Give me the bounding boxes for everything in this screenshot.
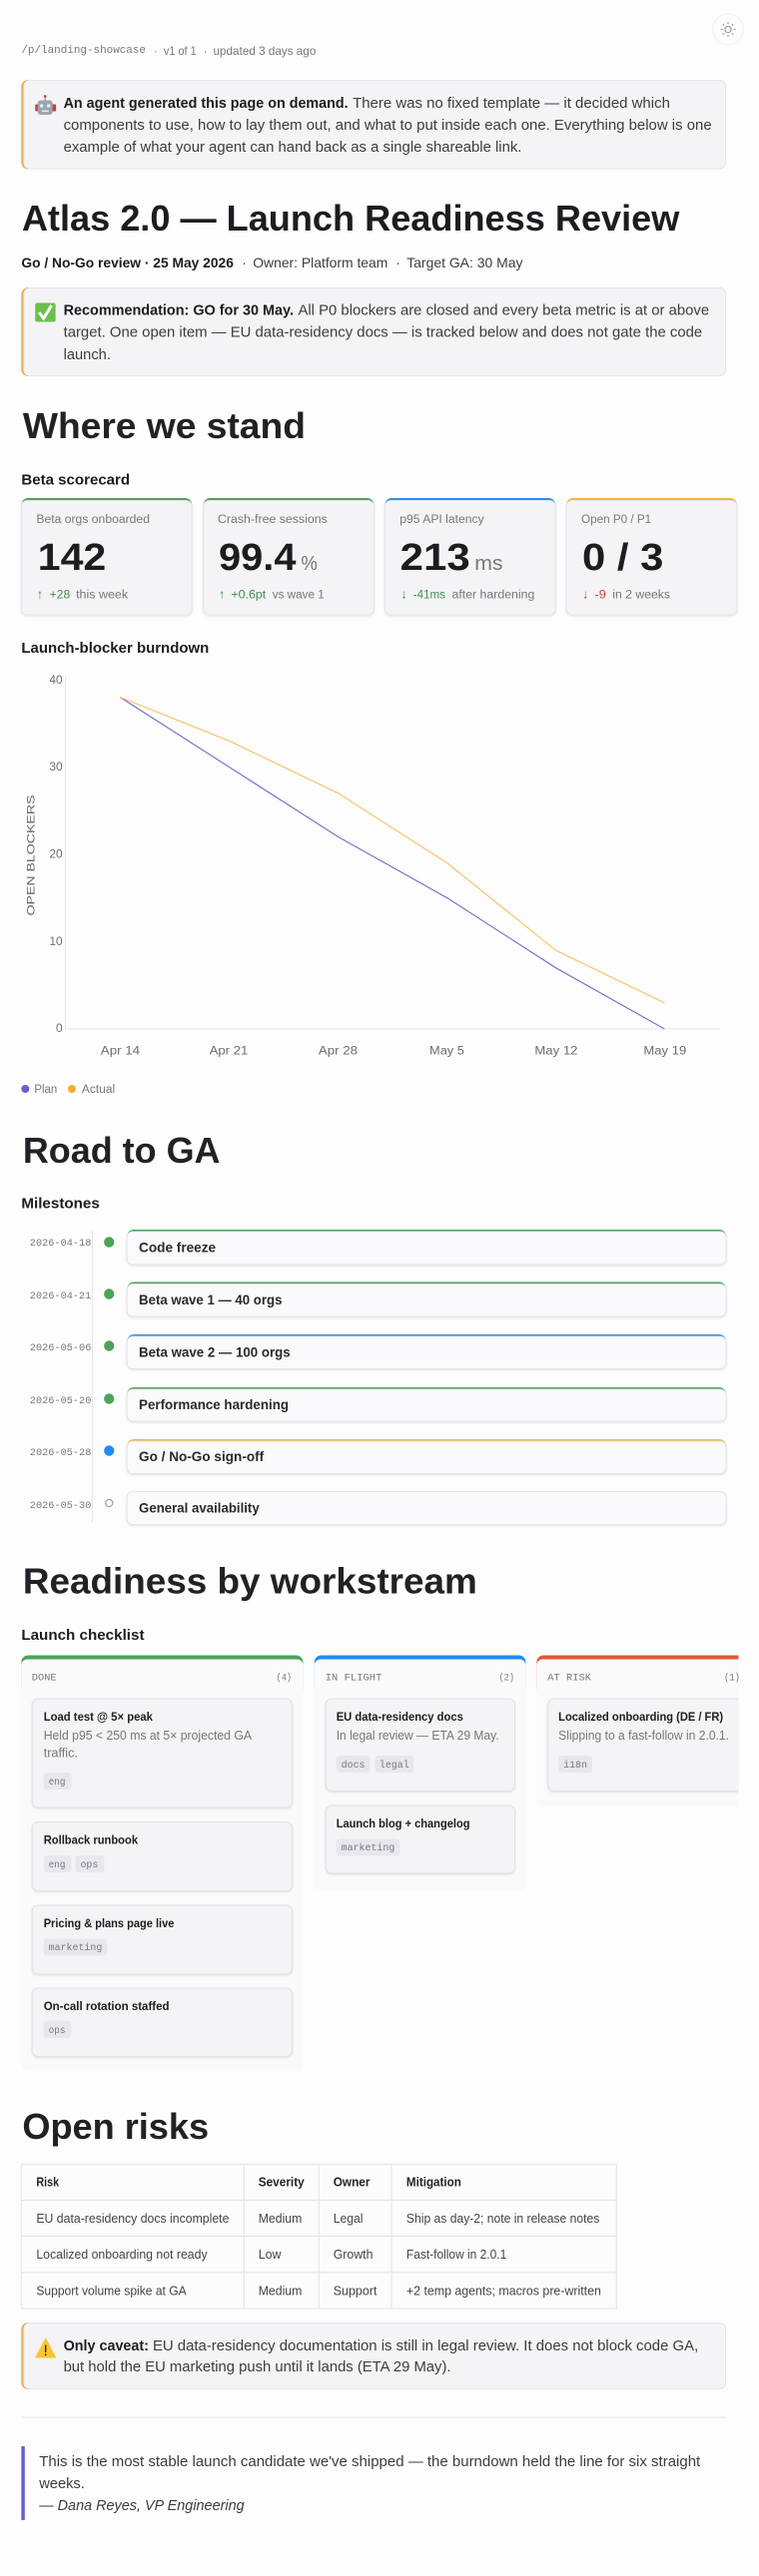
table row: EU docs: Legal	[334, 2212, 364, 2226]
title: Atlas 2.0 — Launch Readiness Review	[22, 199, 679, 239]
metric card: crash-free sessions: vs wave 1	[273, 587, 325, 602]
line chart: burndown	[25, 673, 720, 1058]
heading: launch-blocker burndown: Launch-blocker burndown	[21, 641, 209, 657]
table header: Severity	[259, 2176, 305, 2190]
recommendation text: Recommendation: GO for 30 May.	[64, 303, 294, 319]
milestone: beta wave 2	[30, 1334, 726, 1369]
table row: EU docs: Ship as day-2; note in release notes	[406, 2212, 599, 2226]
card: EU data-residency docs: In legal review — ETA 29 May.	[337, 1729, 499, 1743]
column: at risk: AT RISK	[547, 1672, 591, 1683]
chart legend: Actual	[82, 1082, 115, 1096]
card: pricing and plans	[32, 1905, 293, 1974]
card: rollback runbook: Rollback runbook	[44, 1832, 138, 1847]
card: launch blog	[326, 1805, 514, 1873]
subtitle: ·	[395, 256, 400, 270]
table row: localized onboarding	[36, 2248, 506, 2262]
metric card: crash-free sessions: +0.6pt	[231, 587, 267, 602]
x axis labels: May 19	[643, 1044, 687, 1058]
blockquote	[21, 2446, 700, 2520]
card: EU data-residency docs: docs	[342, 1760, 366, 1771]
card: localized onboarding: i18n	[563, 1760, 587, 1771]
heading: road to GA: Road to GA	[23, 1131, 220, 1171]
recommendation text: target. One open item — EU data-residency docs — is tracked below and does not gate the code	[64, 325, 702, 341]
page meta bar: ·	[204, 46, 207, 58]
subtitle: ·	[242, 256, 247, 270]
metric card: crash-free sessions	[204, 498, 374, 615]
timeline: milestones	[30, 1230, 726, 1525]
card: load test	[32, 1699, 293, 1807]
blockquote: This is the most stable launch candidate we've shipped — the burndown held the line for six straight	[39, 2454, 700, 2470]
x axis labels: May 5	[429, 1044, 464, 1058]
metric card: crash-free sessions: Crash-free sessions	[218, 512, 328, 526]
metric card: beta orgs onboarded: Beta orgs onboarded	[36, 512, 150, 526]
milestone: beta wave 1: 2026-04-21	[30, 1290, 91, 1302]
kanban board	[21, 1655, 752, 2071]
metric card: crash-free sessions: %	[301, 553, 318, 575]
y axis labels: 20	[49, 846, 63, 861]
page meta bar: v1 of 1	[164, 46, 197, 58]
milestone: general availability: 2026-05-30	[30, 1500, 91, 1512]
metric card: open P0 / P1: -9	[594, 587, 606, 602]
divider	[21, 2417, 726, 2418]
card: launch blog: Launch blog + changelog	[337, 1816, 469, 1830]
milestone: general availability	[30, 1491, 726, 1525]
card: localized onboarding	[548, 1699, 741, 1791]
card: load test: traffic.	[44, 1747, 78, 1761]
card: on-call rotation	[32, 1988, 293, 2056]
table row: support volume: +2 temp agents; macros pre-written	[406, 2284, 601, 2298]
metric card: beta orgs onboarded: ↑	[37, 587, 43, 602]
milestone: performance hardening: 2026-05-20	[30, 1395, 91, 1407]
chart legend: Plan	[34, 1082, 57, 1096]
table row: EU docs	[36, 2212, 599, 2226]
metric card: p95 API latency: 213	[400, 537, 470, 579]
heading: where we stand: Where we stand	[23, 406, 306, 446]
callout text: example of what your agent can hand back as a single shareable link.	[64, 140, 521, 156]
table row: support volume	[36, 2284, 601, 2298]
heading: beta scorecard: Beta scorecard	[21, 473, 130, 489]
column: in flight: IN FLIGHT	[326, 1672, 381, 1683]
panel: beta scorecard metrics	[21, 498, 737, 615]
metric card: open P0 / P1	[566, 498, 737, 615]
milestone: code freeze: 2026-04-18	[30, 1238, 91, 1250]
milestone: beta wave 1	[30, 1282, 726, 1316]
callout text: An agent generated this page on demand.	[64, 96, 349, 112]
card: EU data-residency docs	[326, 1699, 514, 1791]
recommendation text: launch.	[64, 347, 111, 363]
table row: localized onboarding: Low	[259, 2248, 282, 2262]
x axis labels: Apr 21	[210, 1044, 249, 1058]
series: plan	[120, 697, 664, 1029]
series: actual	[120, 697, 664, 1003]
table row: localized onboarding: Growth	[334, 2248, 374, 2262]
metric card: open P0 / P1: ↓	[582, 587, 588, 602]
table row: localized onboarding: Localized onboarding not ready	[36, 2248, 208, 2262]
table: open risks	[21, 2164, 616, 2309]
column: done: DONE	[32, 1672, 57, 1683]
icon: warning	[36, 2338, 56, 2357]
caveat text: EU data-residency documentation is still in legal review. It does not block code GA,	[153, 2338, 698, 2354]
table row: support volume: Support volume spike at GA	[36, 2284, 187, 2298]
caveat text: but hold the EU marketing push until it lands (ETA 29 May).	[64, 2359, 451, 2375]
card: load test: Load test @ 5× peak	[44, 1710, 153, 1724]
x axis labels	[101, 1044, 687, 1058]
heading: launch checklist: Launch checklist	[21, 1628, 145, 1644]
table row: support volume: Support	[334, 2284, 378, 2298]
metric card: p95 API latency	[384, 498, 555, 615]
card: rollback runbook: ops	[80, 1859, 98, 1870]
table row: localized onboarding: Fast-follow in 2.0.1	[406, 2248, 506, 2262]
x axis labels: Apr 28	[319, 1044, 358, 1058]
table header: Risk	[36, 2176, 59, 2190]
y axis labels: 30	[49, 760, 63, 773]
callout text: components to use, how to lay them out, and what to put inside each one. Everything below is one	[64, 118, 712, 134]
card: on-call rotation: On-call rotation staffed	[44, 1999, 170, 2013]
page meta bar: updated 3 days ago	[214, 46, 316, 58]
chart legend	[21, 1082, 115, 1096]
milestone: beta wave 2: Beta wave 2 — 100 orgs	[139, 1343, 291, 1360]
table header: Mitigation	[406, 2176, 461, 2190]
heading: readiness by workstream: Readiness by workstream	[23, 1561, 477, 1602]
y axis title: OPEN BLOCKERS	[25, 794, 37, 915]
metric card: beta orgs onboarded: 142	[38, 537, 106, 579]
table header: Owner	[334, 2176, 371, 2190]
column: done	[21, 1655, 303, 2071]
column: at risk	[536, 1655, 739, 1794]
y axis labels: 10	[49, 934, 63, 948]
card: EU data-residency docs: EU data-residency docs	[337, 1710, 463, 1724]
table header	[36, 2176, 461, 2190]
metric card: p95 API latency: ms	[474, 553, 503, 575]
callout: recommendation	[21, 287, 726, 376]
card: on-call rotation: ops	[49, 2025, 66, 2036]
y axis labels	[49, 673, 63, 1035]
column: done: (4)	[277, 1672, 292, 1683]
blockquote: weeks.	[38, 2476, 85, 2492]
milestone: beta wave 1: Beta wave 1 — 40 orgs	[139, 1291, 283, 1307]
metric card: beta orgs onboarded: +28	[50, 587, 71, 602]
card: rollback runbook: eng	[49, 1859, 66, 1870]
metric card: open P0 / P1: 0 / 3	[582, 537, 663, 579]
y axis labels: 0	[56, 1021, 63, 1035]
column: in flight: (2)	[499, 1672, 514, 1683]
table row: EU docs: Medium	[259, 2212, 302, 2226]
column: at risk: (1)	[724, 1672, 740, 1683]
card: load test: Held p95 < 250 ms at 5× projected GA	[44, 1729, 253, 1743]
card: EU data-residency docs: legal	[380, 1760, 409, 1771]
milestone: performance hardening	[30, 1387, 726, 1421]
table row: support volume: Medium	[259, 2284, 302, 2298]
subtitle: Target GA: 30 May	[406, 256, 523, 270]
theme toggle icon: sun	[713, 14, 743, 45]
milestone: performance hardening: Performance hardening	[139, 1396, 289, 1412]
page meta bar: /p/landing-showcase	[21, 45, 146, 57]
metric card: beta orgs onboarded: this week	[76, 587, 128, 602]
metric card: p95 API latency: ↓	[400, 587, 406, 602]
table row: EU docs: EU data-residency docs incomplete	[36, 2212, 230, 2226]
milestone: go / no-go sign-off: 2026-05-28	[30, 1447, 91, 1459]
heading: milestones: Milestones	[21, 1197, 100, 1213]
metric card: p95 API latency: -41ms	[413, 587, 445, 602]
milestone: general availability: General availability	[139, 1499, 260, 1516]
card: localized onboarding: Localized onboarding (DE / FR)	[558, 1710, 723, 1724]
card: localized onboarding: Slipping to a fast-follow in 2.0.1.	[558, 1729, 729, 1743]
metric card: crash-free sessions: ↑	[219, 587, 225, 602]
callout: agent generated notice	[21, 80, 726, 170]
card: launch blog: marketing	[342, 1842, 394, 1853]
caveat text	[64, 2338, 698, 2375]
blockquote: — Dana Reyes, VP Engineering	[38, 2498, 245, 2514]
milestone: code freeze: Code freeze	[139, 1240, 216, 1256]
y axis labels: 40	[49, 673, 63, 687]
subtitle: Go / No-Go review · 25 May 2026	[21, 256, 234, 270]
milestone: go / no-go sign-off: Go / No-Go sign-off	[139, 1448, 265, 1464]
milestone: go / no-go sign-off	[30, 1439, 726, 1473]
card: pricing and plans: Pricing & plans page live	[44, 1916, 175, 1930]
metric card: p95 API latency: p95 API latency	[399, 512, 484, 526]
x axis labels: May 12	[534, 1044, 578, 1058]
metric card: open P0 / P1: Open P0 / P1	[581, 512, 651, 526]
recommendation text	[64, 303, 709, 363]
card: pricing and plans: marketing	[49, 1942, 102, 1953]
page meta bar: ·	[154, 46, 158, 58]
x axis labels: Apr 14	[101, 1044, 140, 1058]
callout text: There was no fixed template — it decided which	[353, 96, 670, 112]
subtitle	[21, 256, 523, 270]
card: rollback runbook	[32, 1822, 293, 1890]
icon: green check	[35, 303, 56, 321]
caveat text: Only caveat:	[64, 2338, 149, 2354]
metric card: open P0 / P1: in 2 weeks	[612, 587, 670, 602]
callout text	[64, 96, 712, 156]
milestone: beta wave 2: 2026-05-06	[30, 1342, 91, 1354]
heading: open risks: Open risks	[22, 2107, 209, 2147]
metric card: beta orgs onboarded	[21, 498, 192, 615]
recommendation text: All P0 blockers are closed and every beta metric is at or above	[298, 303, 709, 319]
card: load test: eng	[49, 1777, 66, 1788]
subtitle: Owner: Platform team	[253, 256, 387, 270]
icon: robot	[35, 95, 56, 115]
column: in flight	[315, 1655, 525, 1890]
metric card: crash-free sessions: 99.4	[219, 537, 296, 579]
page meta bar	[21, 45, 316, 58]
milestone: code freeze	[30, 1230, 726, 1265]
callout: only caveat	[21, 2322, 726, 2389]
metric card: p95 API latency: after hardening	[452, 587, 534, 602]
